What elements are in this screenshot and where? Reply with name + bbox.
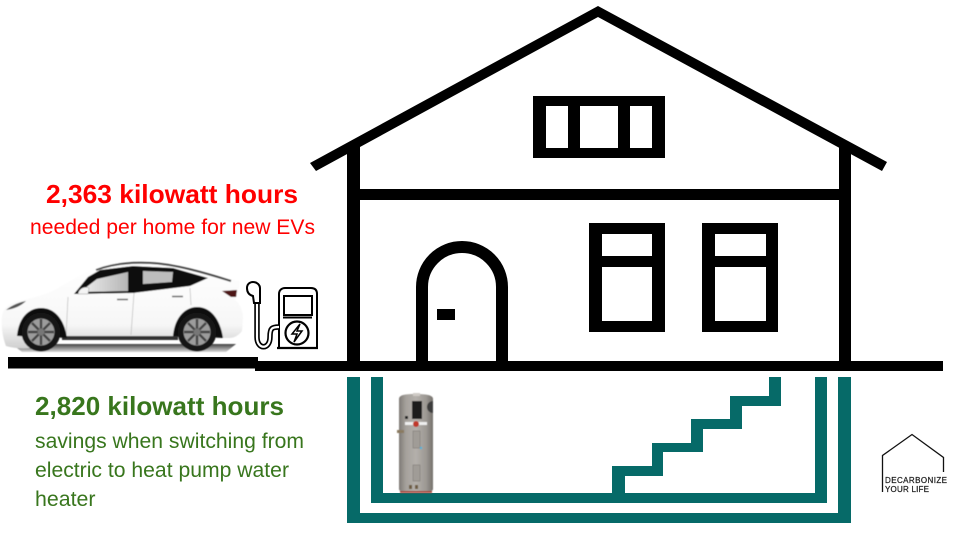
ground line [255, 361, 943, 371]
blue dot [420, 447, 422, 449]
label band [405, 422, 427, 425]
charger base [277, 347, 318, 349]
charging cable [257, 304, 279, 347]
subtext: savings description: savings when switching from [35, 429, 304, 453]
heading: 2,363 kilowatt hours: 2,363 kilowatt hours [46, 179, 298, 209]
charger screen [284, 296, 312, 315]
tank [399, 394, 433, 493]
floor divider [360, 189, 839, 200]
right wall [839, 146, 851, 366]
upper access panel [413, 431, 420, 448]
subtext: savings description: electric to heat pump water [35, 458, 289, 482]
left wall [347, 146, 360, 366]
bottom trim [400, 491, 432, 493]
subtext: savings description: heater [35, 487, 95, 511]
door [422, 247, 502, 362]
front window glass [80, 272, 128, 292]
logo house outline [882, 434, 944, 492]
rear wheel arch [173, 307, 223, 338]
right window [702, 223, 778, 332]
rear wheel [178, 312, 216, 352]
callout: EV electricity need [30, 179, 315, 239]
front wheel [22, 312, 60, 352]
logo [413, 421, 419, 427]
charging plug [247, 282, 260, 303]
charger station body [279, 288, 317, 348]
front wheel arch [17, 308, 67, 338]
logo: Decarbonize Your Life [882, 434, 947, 494]
door lines [66, 288, 191, 337]
door handles [117, 296, 183, 300]
charger bolt badge [286, 322, 308, 344]
door handle [437, 309, 455, 320]
logo text [885, 476, 947, 494]
small sensor [405, 416, 408, 419]
heat pump water heater [397, 393, 433, 493]
headlight [6, 301, 26, 310]
subtext: needed per home: needed per home for new EVs [30, 215, 315, 239]
attic window [533, 96, 665, 158]
subtext: savings description [35, 429, 304, 511]
roof line [96, 263, 231, 281]
lower access panel [413, 465, 420, 481]
side mirror [78, 287, 89, 294]
driveway line [8, 357, 258, 368]
heading: 2,820 kilowatt hours: 2,820 kilowatt hours [35, 391, 284, 421]
left window [589, 223, 665, 332]
basement stairs [612, 377, 781, 493]
car body [2, 262, 243, 348]
basement walls [347, 377, 851, 523]
tail light [222, 290, 237, 297]
electric car [2, 262, 243, 352]
screen divider [283, 316, 312, 318]
ground shadow [12, 344, 236, 352]
logo text: YOUR LIFE [885, 485, 929, 494]
logo text: DECARBONIZE [885, 476, 947, 485]
roof [310, 6, 887, 171]
callout: water heater savings [35, 391, 304, 511]
control panel [412, 401, 422, 419]
icon: EV charger [247, 282, 318, 348]
door arch [422, 247, 502, 362]
window band [74, 266, 208, 294]
drain valves [409, 485, 418, 489]
relief valve [397, 430, 404, 433]
house outline [255, 6, 943, 371]
rear window glass [143, 271, 173, 284]
sill shadow [62, 336, 178, 340]
top cap [413, 393, 420, 396]
fan vent [427, 401, 433, 413]
